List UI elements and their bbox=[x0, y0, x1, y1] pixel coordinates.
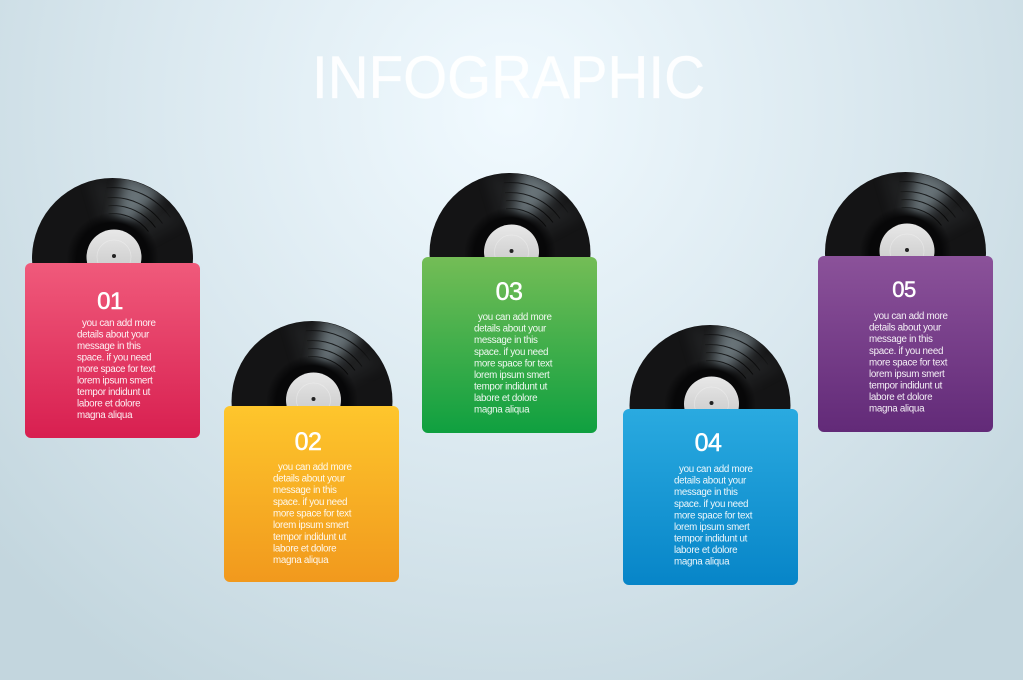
text block 02: you can add more bbox=[278, 462, 352, 473]
text block 04: details about your bbox=[674, 476, 747, 486]
text block 03: more space for text bbox=[474, 358, 553, 370]
number 03: 03 bbox=[496, 278, 522, 306]
text block 03: tempor indidunt ut bbox=[474, 382, 548, 392]
text block 04: lorem ipsum smert bbox=[674, 522, 750, 533]
text block 04: labore et dolore bbox=[674, 545, 738, 556]
panel: step 01 bbox=[25, 170, 200, 438]
title: INFOGRAPHIC bbox=[312, 44, 705, 111]
text block 04: space. if you need bbox=[674, 499, 748, 510]
number 04: 04 bbox=[695, 429, 722, 457]
text block 02: labore et dolore bbox=[273, 544, 337, 554]
text block 04: you can add more bbox=[679, 464, 753, 475]
number 01: 01 bbox=[97, 288, 123, 315]
icon: vinyl record 05 bbox=[825, 164, 986, 333]
card 05 bbox=[818, 256, 993, 432]
text block 04: magna aliqua bbox=[674, 556, 730, 568]
text block 01: labore et dolore bbox=[77, 398, 141, 410]
text block 05: labore et dolore bbox=[869, 392, 933, 403]
panel: step 04 bbox=[623, 318, 798, 585]
icon: vinyl record 03 bbox=[430, 166, 590, 334]
card 04 bbox=[623, 409, 798, 585]
text block 04: more space for text bbox=[674, 510, 753, 522]
text block 01: tempor indidunt ut bbox=[77, 387, 151, 398]
icon: vinyl record 01 bbox=[32, 170, 193, 339]
text block 03: space. if you need bbox=[474, 347, 548, 358]
text block 02: tempor indidunt ut bbox=[273, 532, 347, 543]
text block 03: message in this bbox=[474, 335, 538, 346]
text block 03: magna aliqua bbox=[474, 404, 530, 416]
panel: step 02 bbox=[224, 314, 399, 582]
text block 01: details about your bbox=[77, 330, 150, 340]
text block 01: space. if you need bbox=[77, 352, 151, 364]
text block 05: magna aliqua bbox=[869, 404, 925, 414]
text block 01: lorem ipsum smert bbox=[77, 376, 153, 386]
text block 01: more space for text bbox=[77, 364, 156, 375]
text block 02: more space for text bbox=[273, 508, 352, 520]
number 05: 05 bbox=[892, 277, 916, 302]
text block 02: magna aliqua bbox=[273, 555, 329, 566]
panel: step 03 bbox=[422, 166, 597, 433]
panel: step 05 bbox=[818, 164, 993, 432]
text block 04: tempor indidunt ut bbox=[674, 534, 748, 544]
text block 05: tempor indidunt ut bbox=[869, 380, 943, 392]
icon: vinyl record 02 bbox=[232, 314, 392, 482]
text block 05: you can add more bbox=[874, 311, 948, 322]
icon: vinyl record 04 bbox=[630, 318, 790, 486]
card 01 bbox=[25, 263, 200, 438]
text block 05: more space for text bbox=[869, 358, 948, 368]
text block 02: message in this bbox=[273, 485, 337, 496]
text block 03: you can add more bbox=[478, 312, 552, 323]
text block 05: space. if you need bbox=[869, 346, 943, 357]
text block 01: you can add more bbox=[82, 318, 156, 329]
text block 03: labore et dolore bbox=[474, 393, 538, 404]
text block 01: magna aliqua bbox=[77, 410, 133, 421]
text block 02: details about your bbox=[273, 474, 346, 484]
card 03 bbox=[422, 257, 597, 433]
text block 03: details about your bbox=[474, 324, 547, 334]
card 02 bbox=[224, 406, 399, 582]
text block 02: lorem ipsum smert bbox=[273, 520, 349, 531]
text block 05: lorem ipsum smert bbox=[869, 369, 945, 380]
text block 01: message in this bbox=[77, 341, 141, 352]
number 02: 02 bbox=[295, 428, 321, 456]
text block 03: lorem ipsum smert bbox=[474, 370, 550, 381]
text block 04: message in this bbox=[674, 487, 738, 498]
text block 05: details about your bbox=[869, 322, 942, 334]
text block 05: message in this bbox=[869, 334, 933, 345]
text block 02: space. if you need bbox=[273, 497, 347, 508]
